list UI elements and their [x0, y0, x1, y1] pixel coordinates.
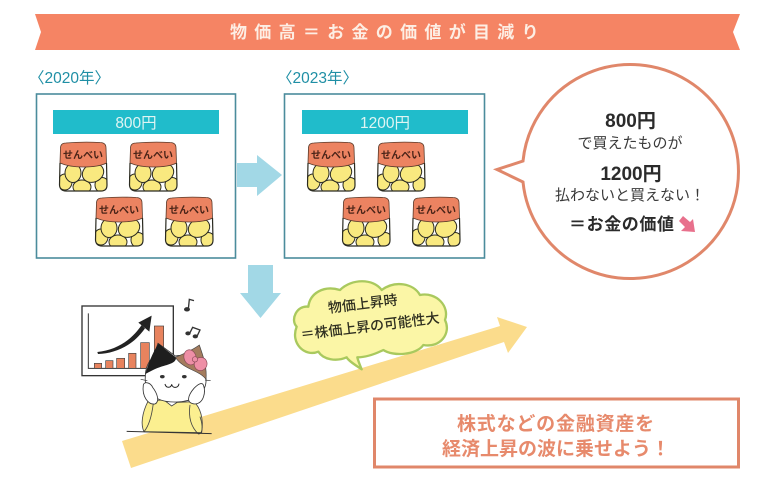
icon: senbei pack 3: せんべい: [346, 204, 386, 216]
speech bubble: loss of money value: 払わないと買えない！: [555, 187, 705, 204]
cloud text: 物価上昇時: [327, 291, 398, 316]
cloud text: ＝株価上昇の可能性大: [300, 310, 440, 342]
title banner: 物価高＝お金の価値が目減り: [230, 22, 546, 42]
icon: senbei pack 4: [411, 197, 462, 249]
icon: senbei pack 2: せんべい: [133, 150, 173, 162]
speech bubble: loss of money value: で買えたものが: [577, 135, 683, 152]
speech bubble: loss of money value: 1200円: [600, 164, 662, 185]
head: [145, 343, 206, 402]
speech bubble: loss of money value: 800円: [605, 111, 656, 132]
hands: [143, 383, 158, 404]
panel: 2020: [36, 94, 236, 258]
bow: [182, 348, 209, 373]
music notes: [185, 299, 200, 338]
illustration: cat with chart: [82, 299, 212, 434]
face: [160, 375, 165, 378]
callout: call to action: 経済上昇の波に乗せよう！: [442, 438, 670, 460]
title banner: [35, 14, 740, 50]
price bar: 1200 yen: 1200円: [360, 115, 410, 132]
price bar: 1200 yen: [302, 110, 468, 134]
arrow: down: [240, 265, 281, 318]
arrow: rising economy: [122, 317, 527, 468]
icon: senbei pack 2: [128, 142, 179, 194]
price bar: 800 yen: [53, 110, 219, 134]
icon: senbei pack 1: せんべい: [63, 150, 103, 162]
icon: senbei pack 4: [164, 197, 215, 249]
year label: 2020: 〈2020年〉: [29, 69, 110, 87]
callout: call to action: 株式などの金融資産を: [457, 413, 655, 435]
icon: senbei pack 4: せんべい: [169, 204, 209, 216]
icon: senbei pack 1: せんべい: [311, 150, 351, 162]
icon: down arrow: [679, 216, 695, 232]
icon: senbei pack 2: [376, 142, 427, 194]
icon: senbei pack 3: [94, 197, 145, 249]
speech bubble: loss of money value: [497, 65, 738, 279]
panel: 2023: [284, 94, 484, 258]
icon: senbei pack 1: [58, 142, 109, 194]
arrow: right: [237, 155, 282, 196]
callout: call to action: [374, 399, 738, 467]
speech cloud: stock price: [294, 281, 447, 369]
icon: senbei pack 2: せんべい: [381, 150, 421, 162]
sweater: [142, 400, 202, 433]
icon: senbei pack 4: せんべい: [416, 204, 456, 216]
icon: senbei pack 3: [341, 197, 392, 249]
speech bubble: loss of money value: ＝お金の価値: [569, 214, 675, 234]
cloud text: [300, 291, 440, 342]
chart board: [82, 306, 173, 376]
year label: 2023: 〈2023年〉: [277, 69, 358, 87]
icon: senbei pack 3: せんべい: [99, 204, 139, 216]
icon: senbei pack 1: [306, 142, 357, 194]
price bar: 800 yen: 800円: [115, 115, 157, 132]
